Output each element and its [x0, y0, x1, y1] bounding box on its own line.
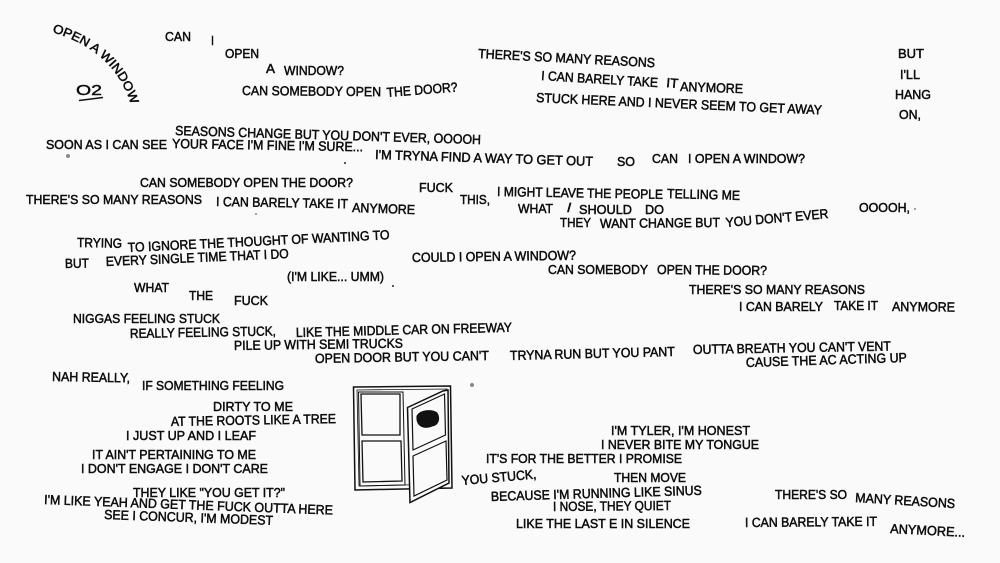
lyrics block: top centre: I: [211, 33, 214, 48]
lyrics block: lower right reasons: MANY REASONS: [855, 490, 956, 511]
lyrics block: second can somebody: I CAN BARELY TAKE IT: [216, 194, 348, 211]
lyrics block: might leave the people: THEY: [560, 215, 591, 230]
lyrics block: could I open a window: ANYMORE: [892, 299, 955, 315]
lyrics block: lower right reasons: [745, 487, 966, 540]
lyrics block: second can somebody: [26, 175, 490, 217]
lyrics block: might leave the people: TELLING ME: [667, 186, 740, 203]
lyrics block: could I open a window: OPEN THE DOOR?: [657, 262, 767, 278]
lyrics block: top centre: OPEN: [225, 46, 259, 61]
lyrics block: might leave the people: YOU DON'T EVER: [725, 206, 829, 230]
lyrics block: feeling stuck: OPEN DOOR BUT YOU CAN'T: [315, 348, 489, 366]
lyrics block: top centre: CAN: [165, 29, 191, 44]
lyrics block: top centre: [165, 29, 458, 100]
lyrics block: But I'll hang on: ON,: [899, 107, 921, 122]
lyrics block: could I open a window: TAKE IT: [834, 298, 878, 313]
lyrics block: trying to ignore: TO IGNORE THE THOUGHT OF WANTING TO: [127, 227, 390, 255]
lyrics block: trying to ignore: TRYING: [77, 235, 122, 251]
lyrics block: feeling stuck: CAUSE THE AC ACTING UP: [746, 350, 907, 370]
lyrics block: feeling stuck: LIKE THE MIDDLE CAR ON FREEWAY: [296, 320, 512, 340]
lyrics block: might leave the people: I: [565, 200, 573, 215]
track number 02: [76, 82, 103, 100]
lyrics block: top right reasons: THERE'S SO MANY REASONS: [478, 46, 656, 70]
lyrics block: seasons change: [46, 123, 805, 169]
lyrics block: lower left verse: I'M LIKE YEAH AND GET THE FUCK OUTTA HERE: [44, 492, 333, 518]
lyrics block: trying to ignore: EVERY SINGLE TIME THAT I DO: [105, 246, 289, 269]
lyrics block: lower left verse: DIRTY TO ME: [213, 399, 293, 414]
lyrics block: feeling stuck: NIGGAS FEELING STUCK: [73, 311, 220, 326]
lyrics block: lower left verse: I DON'T ENGAGE I DON'T CARE: [81, 461, 268, 476]
lyrics block: might leave the people: WANT CHANGE BUT: [600, 215, 720, 231]
lyrics block: trying to ignore: [65, 227, 390, 308]
lyrics block: lower right reasons: THERE'S SO: [775, 487, 847, 502]
lyrics block: could I open a window: THERE'S SO MANY REASONS: [689, 282, 865, 297]
lyrics block: could I open a window: COULD I OPEN A WINDOW?: [412, 248, 576, 265]
lyrics block: feeling stuck: REALLY FEELING STUCK,: [130, 323, 276, 341]
window blob: [417, 411, 439, 427]
lyrics block: feeling stuck: PILE UP WITH SEMI TRUCKS: [234, 336, 403, 353]
lyrics block: lower left verse: [44, 369, 336, 528]
title: curved Open a Window: OPEN A WINDOW: [54, 24, 140, 102]
lyrics block: might leave the people: WHAT: [518, 201, 553, 216]
lyrics block: lower centre verse: I'M TYLER, I'M HONEST: [611, 423, 750, 438]
track number 02: O2: [76, 82, 102, 99]
lyrics block: seasons change: SO: [617, 154, 635, 169]
lyrics block: lower left verse: THEY LIKE "YOU GET IT?": [133, 485, 285, 500]
lyrics block: trying to ignore: THE: [189, 288, 213, 303]
lyrics block: might leave the people: OOOOH,: [859, 200, 910, 215]
lyrics block: second can somebody: ANYMORE: [352, 200, 416, 217]
lyrics block: might leave the people: DO: [645, 202, 664, 217]
lyrics block: But I'll hang on: I'LL: [900, 67, 920, 82]
lyrics block: lower centre verse: [461, 423, 759, 531]
lyrics block: feeling stuck: OUTTA BREATH YOU CAN'T VENT: [693, 339, 891, 357]
lyrics block: trying to ignore: WHAT: [134, 280, 169, 295]
icon: open window: [354, 386, 452, 502]
lyrics block: lower centre verse: BECAUSE I'M RUNNING LIKE SINUS: [491, 483, 702, 504]
lyrics block: lower left verse: NAH REALLY,: [52, 369, 130, 385]
lyrics block: seasons change: I OPEN A WINDOW?: [688, 151, 805, 166]
lyrics block: lower left verse: SEE I CONCUR, I'M MODEST: [104, 507, 273, 528]
lyrics block: top centre: WINDOW?: [284, 63, 344, 78]
lyrics block: top right reasons: [478, 46, 822, 117]
lyrics block: lower left verse: I JUST UP AND I LEAF: [126, 428, 256, 443]
lyrics block: seasons change: I'M TRYNA FIND A WAY TO GET OUT: [375, 147, 593, 169]
lyrics block: top right reasons: IT: [666, 75, 679, 91]
lyrics block: trying to ignore: (I'M LIKE... UMM): [287, 269, 384, 284]
lyrics block: top centre: CAN SOMEBODY OPEN: [242, 83, 381, 99]
lyrics block: But I'll hang on: HANG: [895, 87, 931, 102]
lyrics block: lower left verse: IT AIN'T PERTAINING TO ME: [92, 447, 256, 462]
lyrics block: could I open a window: I CAN BARELY: [739, 299, 823, 314]
lyrics block: top right reasons: ANYMORE: [680, 79, 744, 96]
lyrics block: lower left verse: AT THE ROOTS LIKE A TREE: [171, 411, 336, 429]
lyrics block: But I'll hang on: BUT: [898, 46, 924, 61]
lyrics block: seasons change: YOUR FACE I'M FINE I'M SURE...: [172, 136, 363, 154]
lyrics block: lower right reasons: ANYMORE...: [890, 521, 966, 540]
lyrics block: second can somebody: CAN SOMEBODY OPEN THE DOOR?: [140, 175, 353, 190]
lyrics block: lower centre verse: LIKE THE LAST E IN SILENCE: [516, 516, 690, 531]
lyrics block: lower centre verse: YOU STUCK,: [461, 467, 537, 488]
lyrics block: second can somebody: THERE'S SO MANY REASONS: [26, 192, 202, 207]
lyrics block: could I open a window: [412, 248, 955, 315]
lyrics block: feeling stuck: [73, 311, 907, 370]
lyrics block: lower centre verse: THEN MOVE: [614, 470, 686, 485]
lyrics block: lower left verse: IF SOMETHING FEELING: [142, 378, 284, 393]
lyrics block: top right reasons: I CAN BARELY TAKE: [541, 68, 659, 90]
lyrics block: top right reasons: STUCK HERE AND I NEVER SEEM TO GET AWAY: [536, 90, 822, 117]
lyrics block: seasons change: SOON AS I CAN SEE: [46, 137, 167, 152]
lyrics block: could I open a window: CAN SOMEBODY: [548, 262, 648, 277]
lyrics block: seasons change: SEASONS CHANGE BUT YOU DON'T EVER, OOOOH: [175, 123, 481, 147]
lyrics block: lower centre verse: IT'S FOR THE BETTER I PROMISE: [486, 451, 682, 466]
lyrics block: might leave the people: [497, 184, 910, 231]
lyrics block: seasons change: CAN: [652, 151, 678, 166]
lyrics block: might leave the people: I MIGHT LEAVE THE PEOPLE: [497, 184, 663, 202]
lyrics block: trying to ignore: FUCK: [234, 293, 268, 308]
lyrics block: trying to ignore: BUT: [65, 256, 89, 271]
lyrics block: lower centre verse: I NOSE, THEY QUIET: [553, 498, 671, 514]
lyrics block: might leave the people: SHOULD: [579, 202, 632, 217]
lyrics block: second can somebody: THIS,: [460, 192, 490, 207]
lyrics block: lower right reasons: I CAN BARELY TAKE IT: [745, 514, 877, 530]
lyrics block: top centre: A: [266, 61, 275, 76]
lyrics block: top centre: THE DOOR?: [386, 79, 458, 100]
lyrics block: feeling stuck: TRYNA RUN BUT YOU PANT: [510, 344, 675, 363]
lyrics block: lower centre verse: I NEVER BITE MY TONGUE: [601, 437, 759, 452]
lyrics block: But I'll hang on: [895, 46, 931, 122]
lyrics block: second can somebody: FUCK: [419, 180, 453, 195]
